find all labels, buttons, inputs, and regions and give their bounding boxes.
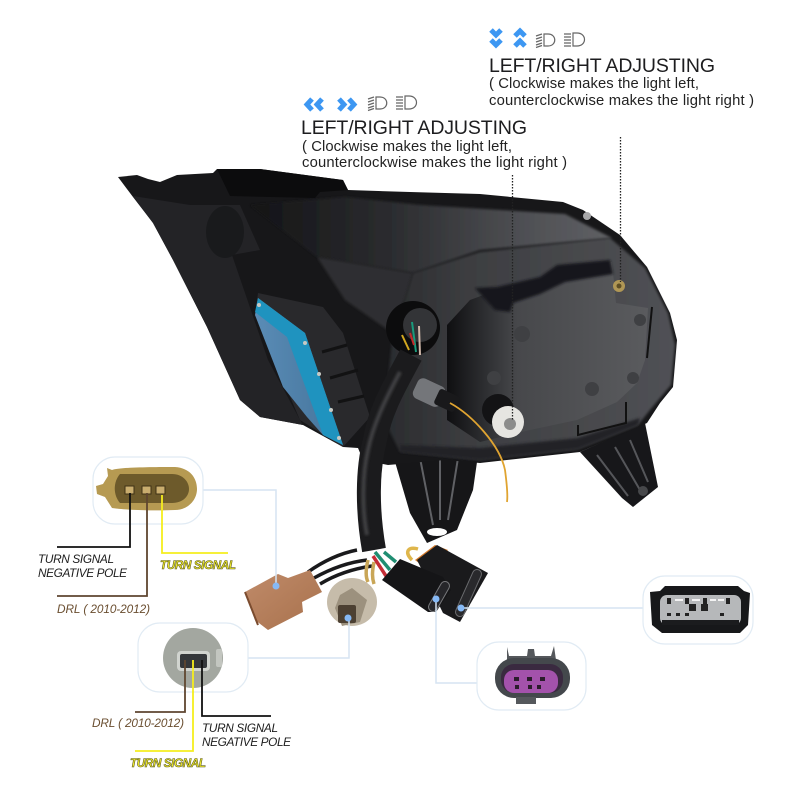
icon row: up/down adjusting bbox=[491, 30, 584, 48]
label: turn signal (lower): TURN SIGNAL bbox=[130, 756, 206, 770]
panel: grey multi-pin connector callout bbox=[643, 576, 753, 644]
text: upper adjusting note: ( Clockwise makes the light left, bbox=[489, 76, 699, 92]
lower shadow of rear plane bbox=[400, 418, 640, 460]
wing hollow bbox=[206, 206, 244, 258]
icon: blue right chevrons bbox=[339, 99, 354, 110]
icon: blue left chevrons bbox=[307, 99, 322, 110]
grommet with wires bbox=[386, 301, 440, 355]
brown connector bbox=[245, 570, 322, 630]
label: turn signal negative pole (lower): TURN SIGNAL bbox=[202, 721, 278, 735]
label: turn signal (upper): TURN SIGNAL bbox=[160, 558, 236, 572]
dotted leader: upper screw bbox=[620, 137, 622, 282]
adjustment cover plate bbox=[447, 262, 648, 442]
icon: fog beam lamp bbox=[368, 97, 387, 110]
top tab bbox=[217, 169, 348, 198]
leader line: grey connector callout bbox=[458, 604, 643, 612]
icon: main beam lamp bbox=[396, 96, 416, 109]
label: turn signal negative pole (upper): TURN SIGNAL bbox=[38, 552, 114, 566]
heading: lower adjusting: LEFT/RIGHT ADJUSTING bbox=[301, 117, 527, 139]
black connector large bbox=[417, 545, 488, 622]
rear plane of housing bbox=[384, 238, 675, 460]
amber wire bbox=[450, 403, 507, 502]
purple connector bbox=[495, 646, 570, 704]
pin wires: first connector bbox=[57, 493, 228, 596]
dotted leader: lower screw bbox=[512, 175, 514, 420]
icon: blue down chevrons bbox=[491, 30, 501, 45]
centre mounting bracket bbox=[393, 455, 478, 543]
top plane of housing bbox=[250, 197, 612, 273]
label: turn signal negative pole (lower): NEGATIVE POLE bbox=[202, 735, 291, 749]
wire loom bbox=[369, 355, 411, 550]
orange connector seal bbox=[415, 545, 448, 570]
housing body bbox=[118, 169, 677, 465]
silver rim screw bbox=[583, 212, 591, 220]
label: DRL (lower): DRL ( 2010-2012) bbox=[92, 716, 184, 730]
text: upper adjusting note: counterclockwise makes the light right ) bbox=[489, 93, 754, 109]
loom highlight bbox=[363, 372, 400, 535]
icon: fog beam lamp bbox=[536, 34, 555, 48]
cover plate slots bbox=[578, 307, 652, 435]
cover plate dents bbox=[487, 314, 646, 396]
panel: amber connector callout bbox=[93, 457, 203, 524]
beige bulb socket bbox=[327, 578, 377, 626]
module dark housing bbox=[255, 293, 370, 447]
module ribs bbox=[322, 345, 364, 402]
scuffed shoulder of housing bbox=[317, 257, 413, 330]
grey disc connector bbox=[163, 628, 223, 688]
heading: upper adjusting: LEFT/RIGHT ADJUSTING bbox=[489, 55, 715, 77]
adjuster screw bbox=[482, 394, 524, 438]
icon: blue up chevrons bbox=[515, 31, 525, 46]
text: lower adjusting note: counterclockwise makes the light right ) bbox=[302, 155, 567, 171]
left side dark wing bbox=[133, 196, 303, 425]
dark band above cover plate bbox=[475, 260, 613, 312]
leader line: beige socket callout bbox=[248, 614, 352, 658]
leader line: purple connector callout bbox=[432, 596, 477, 683]
label: turn signal negative pole (upper): NEGATIVE POLE bbox=[38, 566, 127, 580]
multi-pin connector bbox=[650, 586, 750, 633]
panel: purple connector callout bbox=[477, 642, 586, 710]
side marker socket bbox=[411, 376, 460, 413]
black connector small bbox=[382, 559, 451, 612]
harness wires bbox=[308, 548, 418, 584]
amber connector bbox=[96, 467, 197, 510]
icon: main beam lamp bbox=[564, 33, 584, 46]
wiring harness bbox=[245, 545, 488, 630]
headlight rear housing photo bbox=[118, 169, 677, 550]
text: lower adjusting note: ( Clockwise makes the light left, bbox=[302, 139, 512, 155]
right mounting bracket bbox=[580, 423, 658, 507]
panel: grey disc connector callout bbox=[138, 623, 248, 692]
blue module cover bbox=[255, 298, 343, 445]
label: DRL (upper): DRL ( 2010-2012) bbox=[57, 602, 150, 616]
pin wires: second connector bbox=[135, 660, 271, 751]
gold screw bbox=[613, 280, 625, 292]
leader line: brown connector callout bbox=[203, 490, 280, 590]
icon row: left/right adjusting bbox=[307, 96, 416, 110]
